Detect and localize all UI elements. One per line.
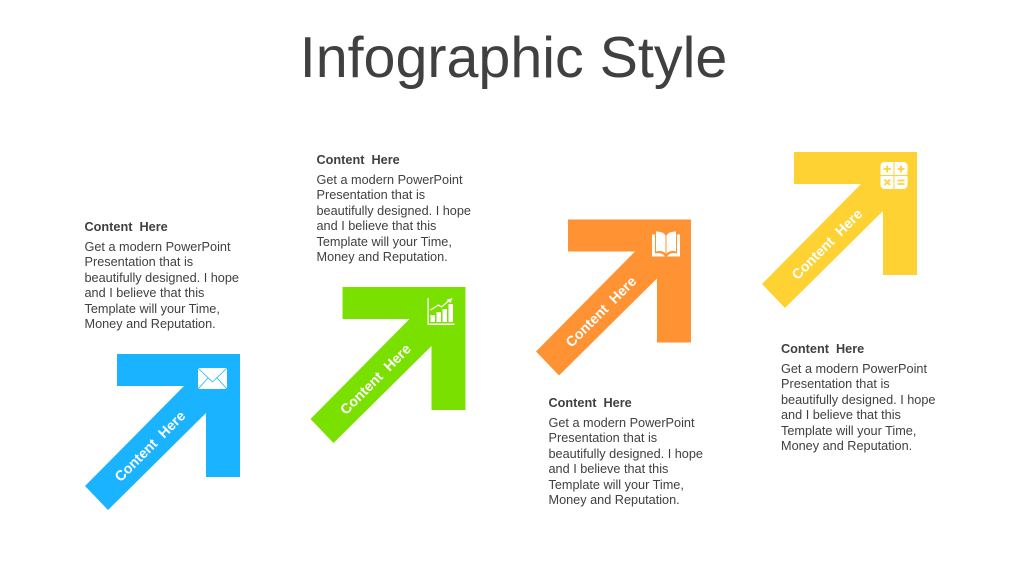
text block: green: beautifully designed. I hope [316,204,471,218]
text block: yellow [781,342,935,453]
text block: orange: beautifully designed. I hope [548,447,703,461]
arrow: orange [536,220,691,376]
text block: blue: Template will your Time, [84,302,220,316]
text block: orange: Presentation that is [548,431,657,445]
arrow: green: Content Here [338,341,415,418]
text block: blue: and I believe that this [84,286,204,300]
text block: orange: and I believe that this [548,462,668,476]
text block: orange: Get a modern PowerPoint [548,416,694,430]
text block: orange: Template will your Time, [548,478,684,492]
arrow: yellow [762,152,917,308]
text block: yellow: Template will your Time, [781,424,916,438]
icon: calculator [880,162,908,189]
icon: open book [652,232,680,256]
icon: bar chart [428,298,454,325]
text block: blue: Content Here [84,220,168,234]
text block: yellow: beautifully designed. I hope [781,393,935,407]
text block: orange: Content Here [548,396,632,410]
text block: orange [548,396,703,507]
text block: yellow: Presentation that is [781,377,890,391]
text block: orange: Money and Reputation. [548,493,680,507]
arrow: yellow: Content Here [789,206,866,283]
text block: blue: Presentation that is [84,255,193,269]
icon: envelope [198,368,227,389]
text block: blue: beautifully designed. I hope [84,271,239,285]
text block: yellow: Content Here [781,342,864,356]
text block: blue: Money and Reputation. [84,317,216,331]
text block: yellow: Get a modern PowerPoint [781,362,927,376]
text block: green: Content Here [316,153,400,167]
text block: green: Presentation that is [316,188,425,202]
arrow: blue [85,354,240,510]
text block: green: Money and Reputation. [316,250,448,264]
title: Infographic Style [300,26,727,90]
arrow: green [310,287,466,443]
text block: green: Get a modern PowerPoint [316,173,462,187]
text block: blue: Get a modern PowerPoint [84,240,230,254]
text block: blue [84,220,239,331]
arrow: orange: Content Here [563,274,640,351]
text block: green: and I believe that this [316,219,436,233]
arrow: blue: Content Here [112,408,189,485]
text block: yellow: Money and Reputation. [781,439,912,453]
text block: green: Template will your Time, [316,235,452,249]
text block: yellow: and I believe that this [781,408,901,422]
text block: green [316,153,471,264]
